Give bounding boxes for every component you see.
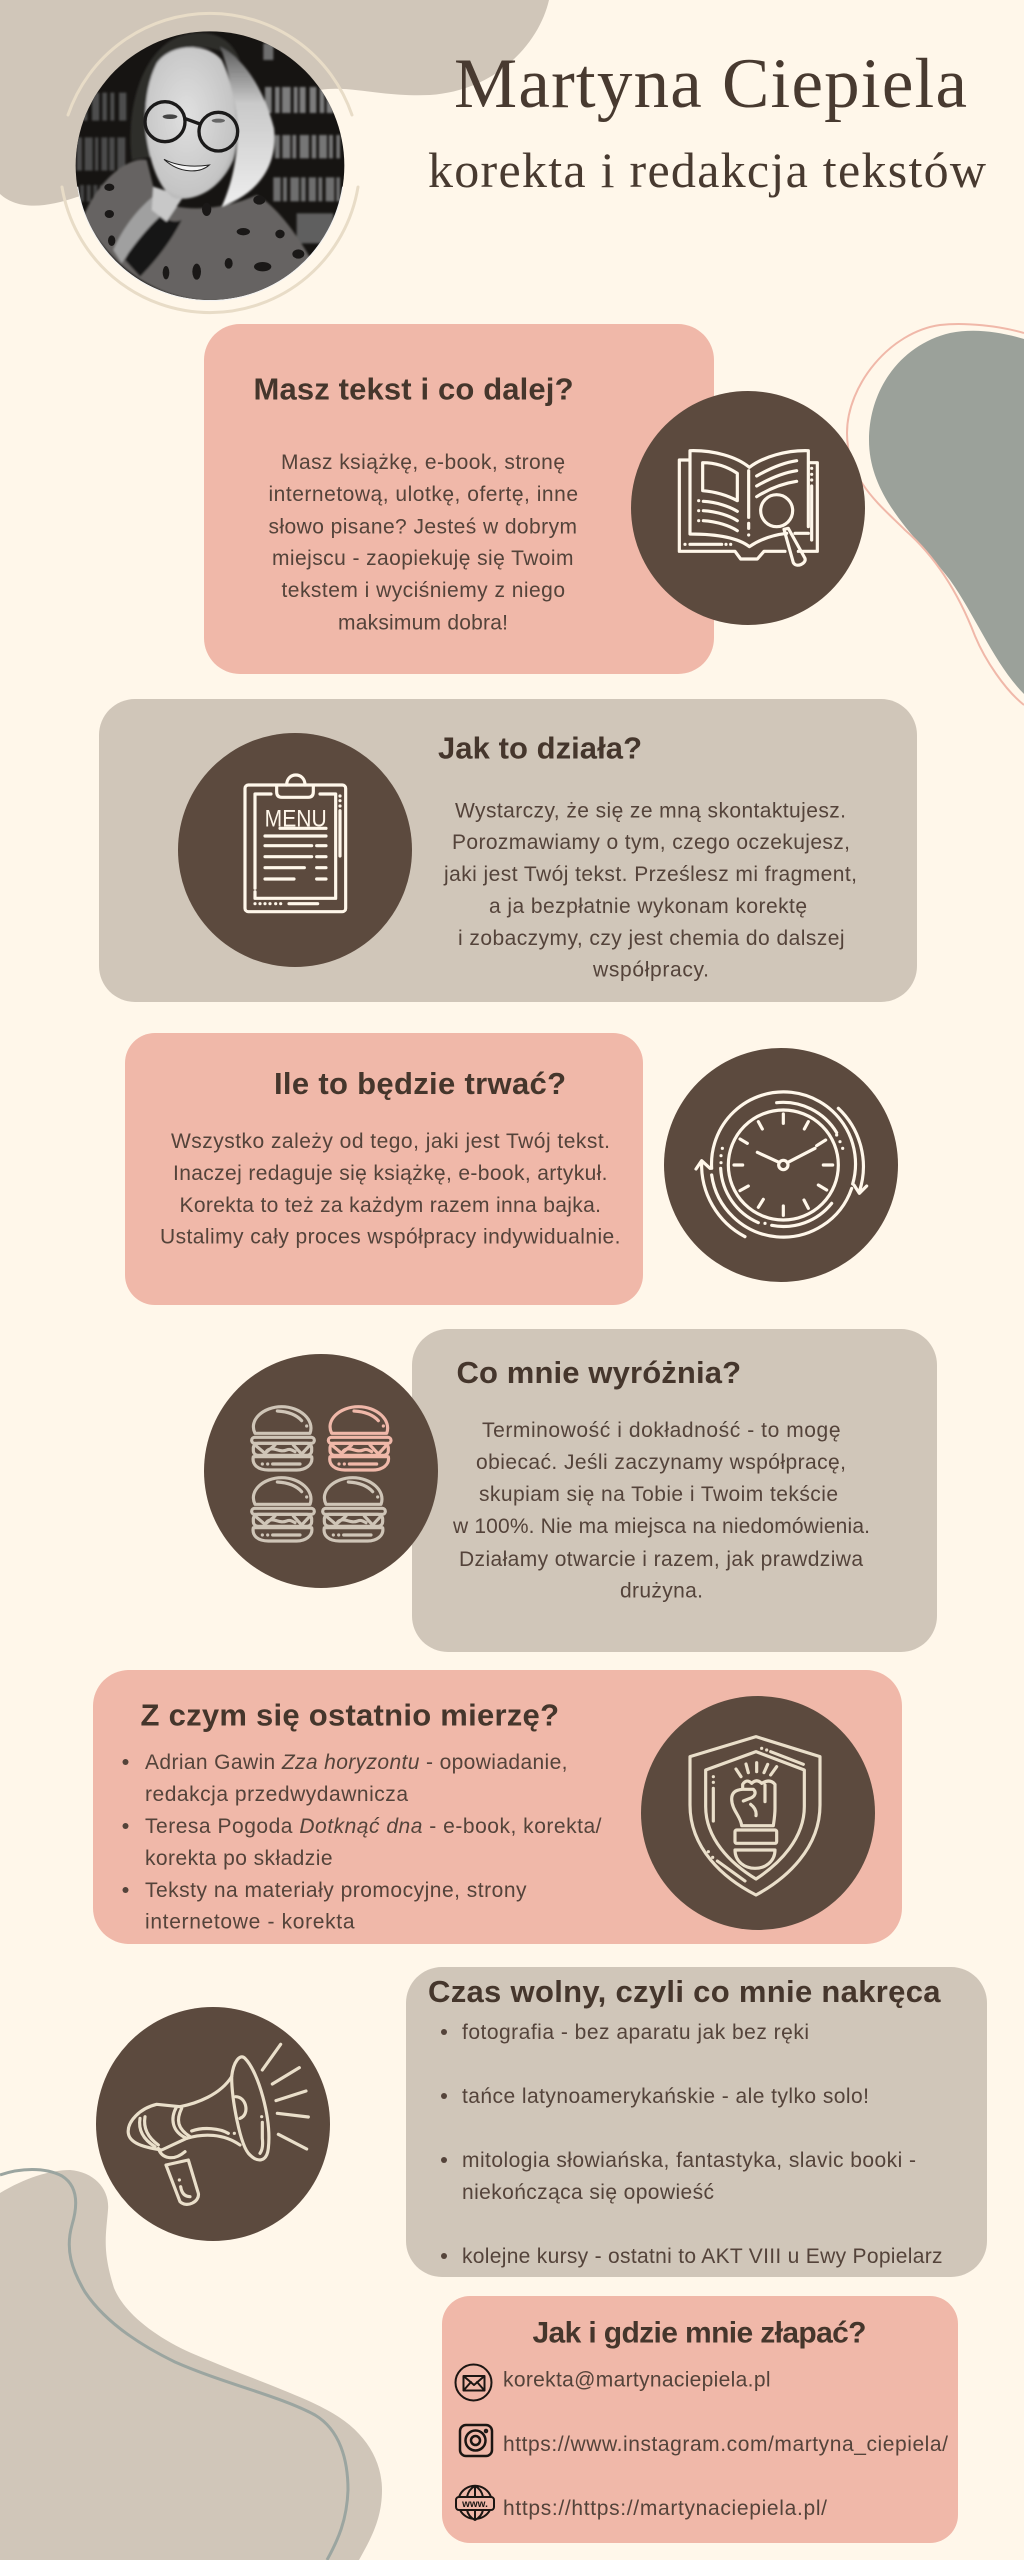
subtitle: korekta i redakcja tekstów	[428, 142, 986, 198]
icon circle	[204, 1354, 438, 1588]
body text: obiecać. Jeśli zaczynamy współpracę,	[476, 1451, 846, 1474]
bullet list: niekończąca się opowieść	[462, 2181, 714, 2204]
portrait illustration	[70, 27, 353, 307]
burger 2 pink	[328, 1407, 391, 1470]
body text: Wystarczy, że się ze mną skontaktujesz.	[455, 800, 846, 822]
icon: instagram	[460, 2425, 492, 2456]
glasses	[145, 102, 238, 151]
bullet list: Adrian Gawin Zza horyzontu - opowiadanie,	[145, 1751, 568, 1774]
icon: email	[456, 2364, 492, 2400]
panel: Jak to działa	[99, 699, 917, 1002]
icon: website globe	[456, 2486, 494, 2520]
card	[412, 1329, 937, 1652]
smile	[164, 159, 209, 171]
body text: skupiam się na Tobie i Twoim tekście	[479, 1483, 838, 1506]
heading: Masz tekst i co dalej?	[254, 372, 574, 406]
bullet list	[122, 1751, 602, 1934]
heading: Czas wolny, czyli co mnie nakręca	[428, 1974, 941, 2009]
icon circle	[178, 733, 412, 967]
heading: Ile to będzie trwać?	[274, 1066, 566, 1101]
icon: website globe: www.	[461, 2499, 488, 2510]
body text: współpracy.	[592, 958, 709, 982]
instagram url: https://www.instagram.com/martyna_ciepiela/	[503, 2433, 948, 2456]
icon circle	[641, 1696, 875, 1930]
body text: tekstem i wyciśniemy z niego	[282, 579, 565, 602]
panel: Co mnie wyróżnia	[204, 1329, 937, 1652]
dark hair	[130, 33, 240, 160]
panel: Czas wolny	[406, 1967, 987, 2277]
body text	[268, 451, 578, 634]
decorative outline: bottom left sage	[0, 2170, 348, 2560]
body text: internetową, ulotkę, ofertę, inne	[268, 483, 578, 506]
decorative blob: bottom left	[0, 2170, 382, 2560]
burger 1	[252, 1407, 314, 1470]
body text: Wszystko zależy od tego, jaki jest Twój tekst.	[171, 1130, 610, 1153]
thin highlight arc	[78, 187, 343, 301]
heading: Z czym się ostatnio mierzę?	[140, 1698, 559, 1732]
icon: four burgers	[252, 1407, 391, 1541]
bullet list: korekta po składzie	[145, 1847, 332, 1870]
icon: menu clipboard	[245, 775, 346, 912]
body text: Korekta to też za każdym razem inna bajka.	[180, 1194, 601, 1217]
icon circle: megaphone	[96, 2007, 330, 2241]
body text: w 100%. Nie ma miejsca na niedomówienia.	[452, 1515, 870, 1538]
body text: Porozmawiamy o tym, czego oczekujesz,	[452, 831, 850, 854]
decorative blob: top left	[0, 0, 549, 206]
cardigan	[83, 160, 313, 302]
bullet list: fotografia - bez aparatu jak bez ręki	[462, 2021, 809, 2044]
body text: a ja bezpłatnie wykonam korektę	[489, 895, 807, 918]
body text: słowo pisane? Jesteś w dobrym	[268, 516, 577, 538]
bullet list: internetowe - korekta	[145, 1910, 355, 1934]
cardigan dots	[104, 184, 304, 280]
icon: clock with arrows	[696, 1092, 867, 1237]
card	[442, 2296, 958, 2543]
card	[99, 699, 917, 1002]
burger 3	[252, 1478, 314, 1541]
card	[406, 1967, 987, 2277]
body text: Działamy otwarcie i razem, jak prawdziwa	[459, 1548, 863, 1571]
body text: Ustalimy cały proces współpracy indywidualnie.	[160, 1226, 620, 1248]
decorative blob: right sage	[869, 331, 1024, 694]
icon: megaphone	[128, 2044, 308, 2204]
burger 4	[323, 1478, 385, 1541]
decorative outline: right pink	[847, 324, 1024, 705]
card	[93, 1670, 902, 1944]
portrait photo with ring	[62, 13, 358, 313]
icon: menu clipboard: MENU	[265, 806, 327, 833]
panel: Jak i gdzie mnie złapać	[442, 2296, 958, 2543]
name: Martyna Ciepiela	[454, 45, 967, 123]
title	[428, 45, 986, 198]
body text: jaki jest Twój tekst. Prześlesz mi fragment,	[443, 863, 857, 886]
email address: korekta@martynaciepiela.pl	[503, 2368, 770, 2392]
body text	[160, 1130, 620, 1248]
body text: Terminowość i dokładność - to mogę	[482, 1419, 840, 1442]
bullet list: kolejne kursy - ostatni to AKT VIII u Ewy Popielarz	[462, 2245, 942, 2268]
panel: Ile to będzie trwać	[125, 1033, 898, 1305]
bullet list: mitologia słowiańska, fantastyka, slavic booki -	[462, 2149, 916, 2172]
body text: maksimum dobra!	[338, 612, 508, 634]
heading: Jak to działa?	[438, 730, 642, 766]
panel: Z czym się ostatnio mierzę	[93, 1670, 902, 1944]
neck	[152, 187, 183, 222]
face	[145, 47, 237, 199]
card	[204, 324, 714, 674]
bullet list: Teksty na materiały promocyjne, strony	[145, 1879, 527, 1902]
icon circle	[631, 391, 865, 625]
body text: miejscu - zaopiekuję się Twoim	[272, 547, 574, 570]
icon: shield with fist	[690, 1737, 820, 1895]
body text	[452, 1419, 870, 1602]
bullet list: Teresa Pogoda Dotknąć dna - e-book, korekta/	[145, 1815, 602, 1838]
body text: i zobaczymy, czy jest chemia do dalszej	[458, 927, 844, 950]
website url: https://https://martynaciepiela.pl/	[503, 2497, 827, 2520]
bullet list: redakcja przedwydawnicza	[145, 1783, 408, 1806]
body text: Masz książkę, e-book, stronę	[281, 451, 565, 474]
bullet list: tańce latynoamerykańskie - ale tylko solo!	[462, 2085, 869, 2108]
panel: Masz tekst i co dalej	[204, 324, 865, 674]
blonde hair	[220, 47, 275, 207]
bullet list	[441, 2021, 942, 2268]
body text	[443, 800, 857, 982]
card	[125, 1033, 643, 1305]
ring arcs	[62, 13, 358, 313]
heading: Co mnie wyróżnia?	[456, 1355, 741, 1390]
heading: Jak i gdzie mnie złapać?	[532, 2316, 866, 2350]
icon circle	[664, 1048, 898, 1282]
body text: Inaczej redaguje się książkę, e-book, artykuł.	[173, 1162, 608, 1185]
icon: open book with magnifier	[679, 451, 817, 565]
body text: drużyna.	[620, 1580, 703, 1602]
